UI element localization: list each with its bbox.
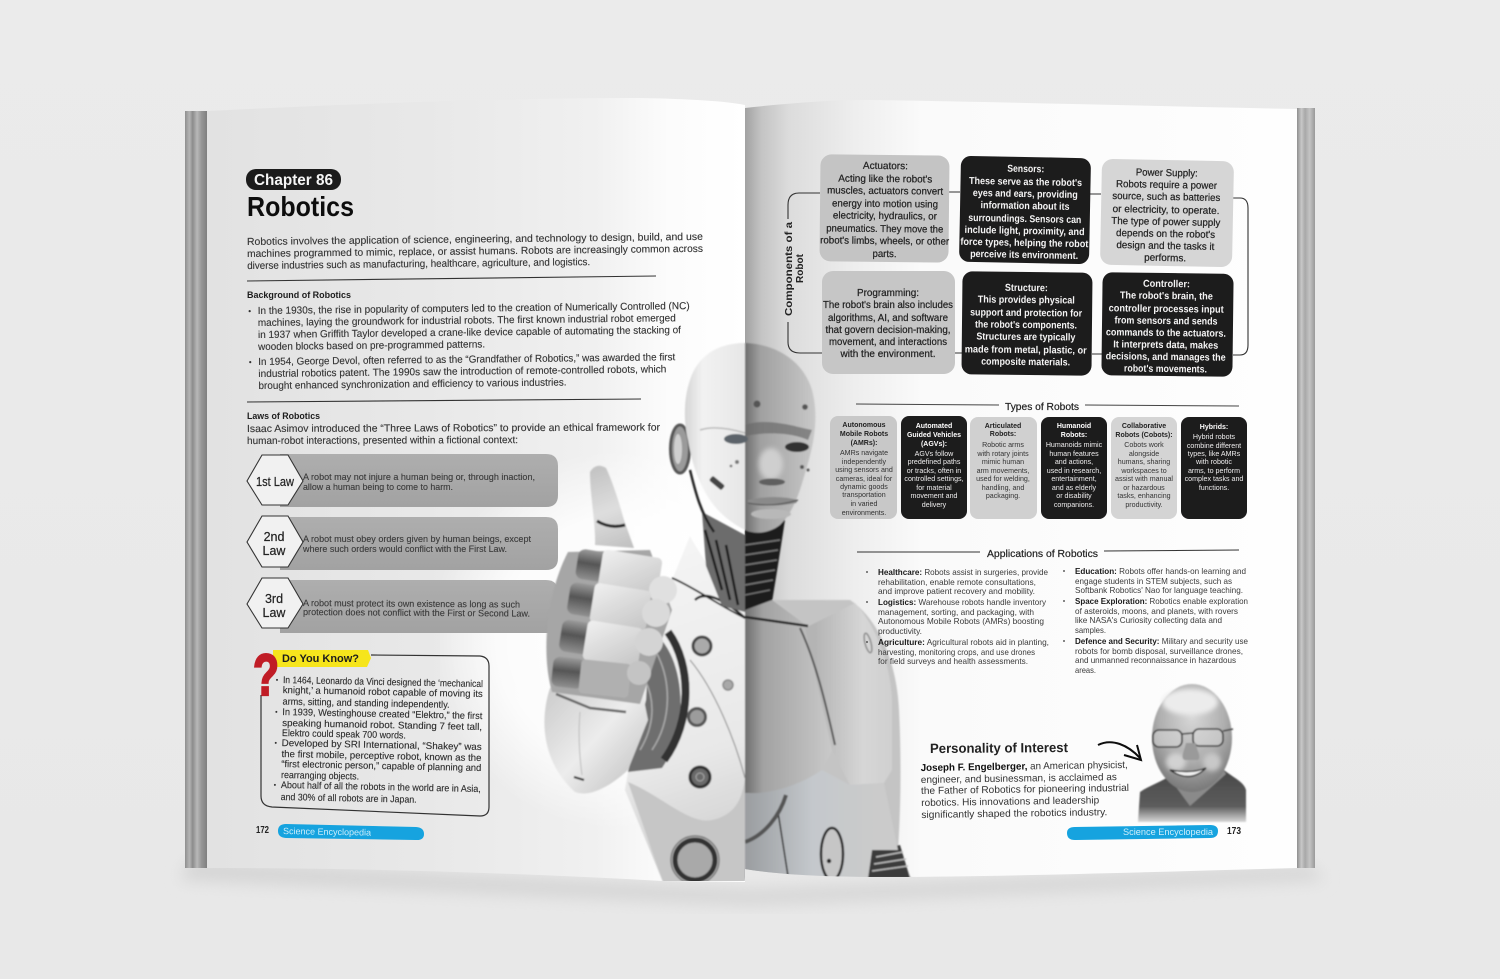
law 1 <box>247 454 558 507</box>
background bullets: machines, laying the groundwork for industrial robots. The first known industrial robot emerged <box>258 313 676 329</box>
robot: face right <box>745 343 815 533</box>
type: autonomous mobile robots: dynamic goods <box>840 483 888 491</box>
applications list right: and unmanned reconnaissance in hazardous <box>1075 656 1236 665</box>
applications list left: Autonomous Mobile Robots (AMRs) boosting <box>878 617 1044 626</box>
applications list right: Softbank Robotics' Nao for language teaching. <box>1075 586 1243 595</box>
type: collaborative robots: or hazardous <box>1123 484 1165 492</box>
footer pill left <box>278 824 424 840</box>
portrait: head <box>1152 684 1232 792</box>
applications list right: like NASA's Curiosity collecting data and <box>1075 616 1222 625</box>
type: humanoid robots: human features <box>1049 450 1099 458</box>
type: hybrids: Hybrids: <box>1200 424 1228 431</box>
applications list right: Defence and Security: Military and security use <box>1075 637 1248 646</box>
components label: Robot <box>794 254 806 283</box>
robot: left torso <box>625 536 745 884</box>
panel: power supply <box>1100 159 1234 267</box>
panel: controller <box>1101 272 1234 377</box>
facts list: Elektro could speak 700 words. <box>282 728 406 741</box>
applications list left: rehabilitation, enable remote consultations, <box>878 578 1036 587</box>
robot: neck <box>702 512 785 618</box>
type: articulated robots: Articulated <box>985 423 1021 430</box>
type: automated guided vehicles: controlled settings, <box>904 475 964 483</box>
box outline <box>261 655 489 816</box>
type: articulated robots: handling, and <box>982 484 1024 492</box>
type: autonomous mobile robots: independently <box>842 458 887 466</box>
personality paragraph: significantly shaped the robotics industry. <box>921 807 1107 821</box>
robot: finger 1 <box>575 548 662 592</box>
type: collaborative robots: Cobots work <box>1124 441 1164 449</box>
panel: power supply: design and the tasks it <box>1116 240 1215 253</box>
robot: ear disc <box>670 425 690 473</box>
type: hybrids: complex tasks and <box>1185 475 1243 483</box>
page number 172: 172 <box>256 825 269 836</box>
type: hybrids: combine different <box>1187 442 1241 450</box>
panel: power supply: The type of power supply <box>1111 216 1220 229</box>
facts list: In 1464, Leonardo da Vinci designed the ‘mechanical <box>283 675 483 690</box>
type: collaborative robots: workspaces to <box>1120 467 1167 475</box>
type: humanoid robots: Robots: <box>1061 432 1087 439</box>
background bullets: brought enhanced synchronization and efficiency to various industries. <box>258 378 567 392</box>
components label <box>783 222 806 316</box>
type: articulated robots: packaging. <box>986 492 1020 500</box>
robot: forearm <box>544 680 648 793</box>
panel: power supply: Robots require a power <box>1116 179 1218 192</box>
panel: sensors: perceive its environment. <box>970 249 1078 262</box>
type: autonomous mobile robots: (AMRs): <box>851 440 877 447</box>
type: autonomous mobile robots: Mobile Robots <box>840 431 888 438</box>
type: hybrids: functions. <box>1199 484 1229 492</box>
panel: power supply: performs. <box>1144 253 1186 264</box>
footer pill right: Science Encyclopedia <box>1123 827 1213 837</box>
panel: programming: movement, and interactions <box>829 337 947 348</box>
type: automated guided vehicles: Automated <box>916 423 952 430</box>
type: articulated robots <box>970 417 1037 519</box>
personality paragraph <box>921 760 1129 821</box>
robot: cheek badge <box>709 476 725 490</box>
type: articulated robots: Robotic arms <box>982 441 1024 449</box>
panel: controller: controller processes input <box>1109 303 1224 316</box>
panel: structure: Structure: <box>1005 283 1048 294</box>
personality paragraph: engineer, and businessman, is acclaimed as <box>921 772 1117 786</box>
type: collaborative robots: tasks, enhancing <box>1117 492 1171 500</box>
personality paragraph: robotics. His innovations and leadership <box>921 795 1100 809</box>
panel: actuators: Acting like the robot's <box>838 174 932 185</box>
yellow label <box>273 650 371 667</box>
page number 173: 173 <box>1227 826 1241 837</box>
facts list: Developed by SRI International, “Shakey” was <box>282 738 482 753</box>
type: collaborative robots: humans, sharing <box>1118 458 1170 466</box>
chapter pill <box>246 169 341 190</box>
right page content <box>783 154 1248 840</box>
facts list: In 1939, Westinghouse created “Elektro,” the first <box>282 707 483 722</box>
robot: hip plate <box>628 778 745 882</box>
laws intro: human-robot interactions, presented within a fictional context: <box>247 435 518 447</box>
facts list: the first mobile, perceptive robot, known as the <box>281 749 482 764</box>
type: articulated robots: Robots: <box>990 431 1016 438</box>
type: humanoid robots <box>1041 417 1107 519</box>
type: humanoid robots: and actions, <box>1055 458 1093 466</box>
panel: programming: algorithms, AI, and software <box>828 313 948 324</box>
type: collaborative robots: alongside <box>1129 450 1159 458</box>
type: humanoid robots: and as elderly <box>1052 484 1097 492</box>
intro paragraph: Robotics involves the application of science, engineering, and technology to design, build, and use <box>247 232 703 248</box>
panel: sensors <box>959 156 1091 264</box>
components of a robot bracket <box>783 192 1248 355</box>
robot: forehead and cheek dots <box>730 400 810 472</box>
robot: mouth <box>748 497 798 519</box>
robot: finger 3 <box>558 620 642 665</box>
left page content <box>246 169 704 840</box>
facts list: “first electronic person,” capable of planning and <box>281 759 481 774</box>
type: collaborative robots: Collaborative <box>1122 423 1166 430</box>
right page <box>745 100 1297 877</box>
panel: structure: made from metal, plastic, or <box>965 344 1087 357</box>
portrait: smile <box>1170 768 1206 777</box>
panel: power supply: depends on the robot's <box>1116 228 1215 241</box>
applications list left: management, sorting, and packaging, with <box>878 608 1034 617</box>
panel: programming: with the environment. <box>840 349 936 360</box>
applications list right: Education: Robots offer hands-on learning and <box>1075 567 1246 576</box>
law 3: protection does not conflict with the First or Second Law. <box>303 607 530 619</box>
panel: sensors: These serve as the robot's <box>969 176 1083 189</box>
law 3: 3rd <box>265 592 283 606</box>
applications list left: Agriculture: Agricultural robots aid in planting, <box>878 638 1049 647</box>
law 1: A robot may not injure a human being or, through inaction, <box>303 472 535 482</box>
panel: sensors: force types, helping the robot <box>960 237 1089 250</box>
open book infographic spread <box>184 98 1315 906</box>
applications list left: for field surveys and health assessments. <box>878 657 1028 666</box>
robot: chest <box>745 600 898 880</box>
robot: nose <box>759 448 785 486</box>
facts list: arms, sitting, and standing independently. <box>282 697 450 711</box>
robot: eyes <box>724 434 809 452</box>
robot: coil <box>628 630 686 772</box>
panel: actuators: parts. <box>872 249 897 260</box>
applications list left: and improve patient recovery and mobility. <box>878 587 1035 596</box>
law 3 <box>247 578 558 633</box>
applications list left: harvesting, monitoring crops, and use drones <box>878 648 1035 657</box>
panel: power supply: Power Supply: <box>1136 167 1198 180</box>
background bullets: In the 1930s, the rise in popularity of computers led to the creation of Numerically Controlled (NC) <box>258 301 690 317</box>
law 1: 1st Law <box>256 475 295 489</box>
panel: controller: from sensors and sends <box>1114 315 1218 328</box>
law 2 <box>247 516 558 570</box>
background bullets <box>249 301 691 392</box>
robot: hand <box>546 466 677 704</box>
facts list: speaking humanoid robot. Standing 7 feet tall, <box>282 718 482 733</box>
type: automated guided vehicles: movement and <box>911 492 958 500</box>
title: Robotics <box>247 191 354 222</box>
type: articulated robots: used for welding, <box>976 475 1030 483</box>
facts list: knight,’ a humanoid robot capable of moving its <box>283 685 483 700</box>
type: articulated robots: mimic human <box>982 458 1024 466</box>
facts list: About half of all the robots in the world are in Asia, <box>281 780 481 795</box>
panel: power supply: source, such as batteries <box>1112 191 1220 204</box>
robot: right arm <box>745 600 912 880</box>
robot: face left <box>685 343 745 530</box>
type: automated guided vehicles: delivery <box>922 501 947 509</box>
applications list right: engage students in STEM subjects, such as <box>1075 577 1232 586</box>
type: autonomous mobile robots: environments. <box>842 509 886 517</box>
type: articulated robots: with rotary joints <box>976 450 1029 458</box>
applications list right: robots for bomb disposal, surveillance drones, <box>1075 647 1243 656</box>
facts list: and 30% of all robots are in Japan. <box>281 792 417 806</box>
panel: actuators: robot's limbs, wheels, or other <box>820 235 950 248</box>
panel: sensors: information about its <box>980 200 1070 213</box>
law 2: 2nd <box>264 530 284 544</box>
type: hybrids: arms, to perform <box>1188 467 1240 475</box>
type: collaborative robots: productivity. <box>1125 501 1163 509</box>
panel: structure: Structures are typically <box>976 331 1076 344</box>
panel: controller: Controller: <box>1143 279 1190 290</box>
type: hybrids: with robotic <box>1195 458 1232 466</box>
panel: controller: commands to the actuators. <box>1106 327 1226 340</box>
chapter pill: Chapter 86 <box>254 172 333 189</box>
panel: programming: Programming: <box>857 288 919 299</box>
heading: background of robotics: Background of Robotics <box>247 290 351 301</box>
panel: controller: It interprets data, makes <box>1113 339 1219 352</box>
panel: sensors: include light, proximity, and <box>964 225 1085 238</box>
robot illustration <box>544 343 912 884</box>
panel: controller: robot's movements. <box>1124 363 1207 375</box>
law 1: allow a human being to come to harm. <box>303 482 453 492</box>
do you know box <box>253 643 489 816</box>
panel: sensors: eyes and ears, providing <box>973 188 1078 201</box>
robot: head <box>670 343 815 533</box>
type: collaborative robots: assist with manual <box>1115 475 1173 483</box>
portrait: nose <box>1183 743 1199 760</box>
robot: buttons <box>671 637 733 884</box>
robot: palm <box>546 550 672 704</box>
laws intro <box>247 423 661 447</box>
panel: sensors: Sensors: <box>1007 164 1044 175</box>
robot: thumb <box>590 466 634 548</box>
type: humanoid robots: used in research, <box>1047 467 1101 475</box>
type: autonomous mobile robots: in varied <box>851 500 877 508</box>
type: articulated robots: arm movements, <box>977 467 1029 475</box>
background bullets: In 1954, George Devol, often referred to as the “Grandfather of Robotics,” was awarded the first <box>258 352 675 368</box>
panel: actuators: electricity, hydraulics, or <box>833 210 938 223</box>
panel: structure: support and protection for <box>970 307 1082 320</box>
applications list right <box>1063 567 1248 675</box>
intro paragraph: diverse industries such as manufacturing, healthcare, agriculture, and logistics. <box>247 257 590 272</box>
intro paragraph: machines programmed to mimic, replace, or assist humans. Robots are increasingly common across <box>247 244 703 260</box>
panel: actuators <box>819 154 951 263</box>
yellow label: Do You Know? <box>282 653 359 665</box>
type: hybrids <box>1181 417 1247 519</box>
panel: programming: that govern decision-making, <box>826 325 950 336</box>
footer pill right <box>1067 825 1218 840</box>
type: automated guided vehicles: AGVs follow <box>915 450 954 458</box>
applications list right: Space Exploration: Robotics enable exploration <box>1075 597 1248 606</box>
components label: Components of a <box>783 222 795 316</box>
robot: finger 4 <box>550 656 631 698</box>
applications list right: samples. <box>1075 626 1106 635</box>
background bullets: industrial robotics patent. The 1990s saw the introduction of remote-controlled robots, which <box>258 364 666 380</box>
type: humanoid robots: companions. <box>1054 501 1094 509</box>
type: automated guided vehicles: (AGVs): <box>921 441 947 448</box>
panel: controller: The robot's brain, the <box>1120 290 1213 303</box>
portrait: shoulders <box>1138 770 1246 822</box>
panel: programming <box>822 271 955 374</box>
type: autonomous mobile robots: using sensors and <box>835 466 893 474</box>
applications list left: productivity. <box>878 627 922 636</box>
right page edge stack <box>1297 108 1315 868</box>
portrait of Joseph Engelberger <box>1138 684 1246 822</box>
facts list <box>274 675 483 807</box>
panel: power supply: or electricity, to operate. <box>1112 204 1220 217</box>
type: hybrids: types, like AMRs <box>1188 450 1241 458</box>
personality paragraph: Joseph F. Engelberger, an American physicist, <box>921 760 1128 774</box>
panel: structure: This provides physical <box>978 294 1075 307</box>
type: collaborative robots <box>1111 417 1177 519</box>
arrow to portrait <box>1098 742 1141 760</box>
type: humanoid robots: entertainment, <box>1051 475 1097 483</box>
heading: laws of robotics: Laws of Robotics <box>247 411 320 422</box>
applications list left: Logistics: Warehouse robots handle inventory <box>878 598 1047 607</box>
type: automated guided vehicles <box>901 416 967 519</box>
heading: types of robots: Types of Robots <box>1005 402 1079 413</box>
panel: structure <box>961 271 1093 376</box>
laws intro: Isaac Asimov introduced the “Three Laws of Robotics” to provide an ethical framework for <box>247 423 661 435</box>
type: hybrids: Hybrid robots <box>1193 433 1236 441</box>
panel: programming: The robot's brain also includes <box>823 300 953 311</box>
law 2: A robot must obey orders given by human beings, except <box>303 534 531 544</box>
background bullets: in 1937 when Griffith Taylor developed a crane-like device capable of automating the stacking of <box>258 325 681 341</box>
portrait: glasses <box>1153 729 1233 747</box>
law 3: A robot must protect its own existence as long as such <box>303 598 520 610</box>
robot: finger 2 <box>566 583 651 630</box>
type: autonomous mobile robots: transportation <box>842 491 886 499</box>
law 3: Law <box>263 606 286 620</box>
footer pill left: Science Encyclopedia <box>283 826 371 838</box>
type: autonomous mobile robots <box>830 416 897 519</box>
type: humanoid robots: Humanoid <box>1057 423 1091 430</box>
type: collaborative robots: Robots (Cobots): <box>1115 432 1173 439</box>
type: humanoid robots: or disability <box>1056 492 1092 500</box>
icon: question mark: ? <box>253 643 279 708</box>
robot: chest oval <box>821 828 843 880</box>
applications list right: of asteroids, moons, and planets, with rovers <box>1075 607 1238 616</box>
left page edge stack <box>185 111 207 868</box>
panel: actuators: pneumatics. They move the <box>826 223 944 236</box>
type: autonomous mobile robots: Autonomous <box>842 422 886 429</box>
personality heading: Personality of Interest <box>930 740 1069 756</box>
type: automated guided vehicles: or tracks, often in <box>907 467 961 475</box>
panel: sensors: surroundings. Sensors can <box>968 213 1081 226</box>
type: automated guided vehicles: predefined paths <box>908 458 961 466</box>
heading: applications of robotics: Applications of Robotics <box>987 549 1098 560</box>
applications list left <box>866 568 1049 666</box>
facts list: rearranging objects. <box>281 770 359 783</box>
type: autonomous mobile robots: AMRs navigate <box>840 449 888 457</box>
type: automated guided vehicles: for material <box>916 484 952 492</box>
law 2: where such orders would conflict with the First Law. <box>302 544 507 554</box>
panel: controller: decisions, and manages the <box>1106 351 1226 364</box>
panel: structure: the robot's components. <box>975 319 1077 332</box>
left page <box>207 98 745 882</box>
personality paragraph: the Father of Robotics for pioneering industrial <box>921 783 1129 797</box>
book shadow <box>180 860 1325 905</box>
panel: structure: composite materials. <box>981 357 1070 368</box>
type: automated guided vehicles: Guided Vehicles <box>907 432 961 439</box>
law 2: Law <box>263 544 286 558</box>
panel: actuators: muscles, actuators convert <box>827 185 943 198</box>
type: autonomous mobile robots: cameras, ideal for <box>836 475 893 483</box>
type: humanoid robots: Humanoids mimic <box>1046 441 1103 449</box>
applications list right: areas. <box>1075 666 1096 675</box>
intro paragraph <box>247 232 704 272</box>
panel: actuators: Actuators: <box>863 161 908 172</box>
applications list left: Healthcare: Robots assist in surgeries, provide <box>878 568 1048 577</box>
background bullets: wooden blocks based on pre-programmed patterns. <box>257 339 485 353</box>
panel: actuators: energy into motion using <box>832 198 938 211</box>
